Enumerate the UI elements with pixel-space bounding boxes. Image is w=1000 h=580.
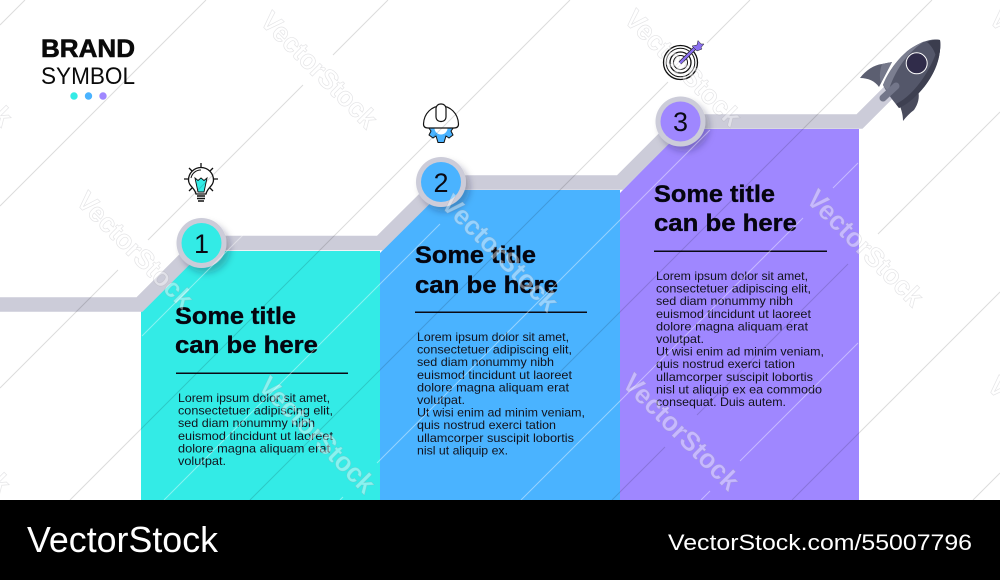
step marker 1 [176, 218, 226, 268]
step marker 3 [656, 96, 706, 146]
watermarks: VectorStock [801, 184, 930, 313]
panel 3 body text: nisl ut aliquip ex ea commodo [656, 384, 822, 396]
step panel 2 background [380, 190, 620, 500]
step marker 1: 1 [194, 229, 209, 259]
watermarks: VectorStock [253, 371, 382, 500]
panel 2 body text: euismod tincidunt ut laoreet [417, 369, 573, 382]
footer bar: VectorStock [27, 519, 219, 560]
panel 3 body text: consectetuer adipiscing elit, [656, 282, 811, 296]
watermarks: VectorStock [71, 186, 200, 315]
stepped grey path [0, 92, 889, 304]
panel 2 body text: dolore magna aliquam erat [417, 382, 570, 394]
panel 1 body text: sed diam nonummy nibh [178, 417, 315, 430]
panel 3 title: Some title [654, 181, 775, 208]
panel 1 body text: euismod tincidunt ut laoreet [178, 430, 334, 443]
footer bar: VectorStock.com/55007796 [668, 530, 972, 555]
panel 1 title [175, 303, 318, 359]
panel 1 body text: consectetuer adipiscing elit, [178, 404, 333, 418]
step marker 2 [416, 157, 466, 207]
step marker 2: 2 [433, 168, 449, 198]
panel 2 body text: sed diam nonummy nibh [417, 356, 554, 369]
panel 2 body text: ullamcorper suscipit lobortis [417, 432, 574, 445]
icon: rocket [860, 39, 940, 121]
step marker 3: 3 [673, 107, 688, 137]
panel 3 body text: quis nostrud exerci tation [656, 358, 795, 371]
brand logo: SYMBOL [41, 63, 135, 90]
watermarks: VectorStock [617, 368, 746, 497]
panel 2 body text: Ut wisi enim ad minim veniam, [417, 406, 585, 420]
brand logo [41, 35, 135, 100]
panel 2 body text [417, 331, 585, 458]
step panel 1 background [141, 251, 380, 500]
panel 3 body text: dolore magna aliquam erat [656, 320, 809, 334]
panel 1 body text [178, 392, 334, 468]
step panel 3 background [620, 129, 859, 500]
panel 2 title [415, 242, 558, 299]
panel 3 body text: consequat. Duis autem. [656, 396, 786, 409]
panel 3 body text: Lorem ipsum dolor sit amet, [656, 270, 808, 283]
panel 2 body text: volutpat. [417, 394, 465, 407]
panel 3 body text: euismod tincidunt ut laoreet [656, 308, 812, 321]
panel 1 body text: volutpat. [178, 455, 226, 468]
panel 1 body text: Lorem ipsum dolor sit amet, [178, 392, 330, 405]
panel 1 body text: dolore magna aliquam erat [178, 442, 331, 456]
panel 3 body text: Ut wisi enim ad minim veniam, [656, 346, 824, 358]
panel 3 body text: volutpat. [656, 333, 704, 346]
watermarks: VectorStock [255, 6, 384, 135]
brand logo: BRAND [41, 35, 135, 63]
panel 2 title: can be here [415, 272, 558, 299]
panel 2 body text: nisl ut aliquip ex. [417, 444, 508, 458]
watermarks: VectorStock [619, 4, 748, 133]
panel 3 title: can be here [654, 210, 797, 237]
watermarks: VectorStock [436, 189, 565, 318]
icon: light bulb [184, 163, 218, 201]
panel 3 body text: sed diam nonummy nibh [656, 295, 793, 308]
panel 2 title: Some title [415, 242, 536, 269]
panel 2 body text: Lorem ipsum dolor sit amet, [417, 331, 569, 344]
panel 1 title: can be here [175, 332, 318, 359]
panel 2 body text: quis nostrud exerci tation [417, 419, 556, 432]
panel 3 body text: ullamcorper suscipit lobortis [656, 371, 813, 384]
panel 3 title [654, 181, 797, 237]
footer bar [0, 500, 1000, 580]
panel 2 body text: consectetuer adipiscing elit, [417, 344, 572, 356]
panel 1 title: Some title [175, 303, 296, 330]
icon: target and arrow [664, 40, 704, 80]
panel 3 body text [656, 270, 824, 409]
icon: helmet and gear [424, 104, 458, 142]
